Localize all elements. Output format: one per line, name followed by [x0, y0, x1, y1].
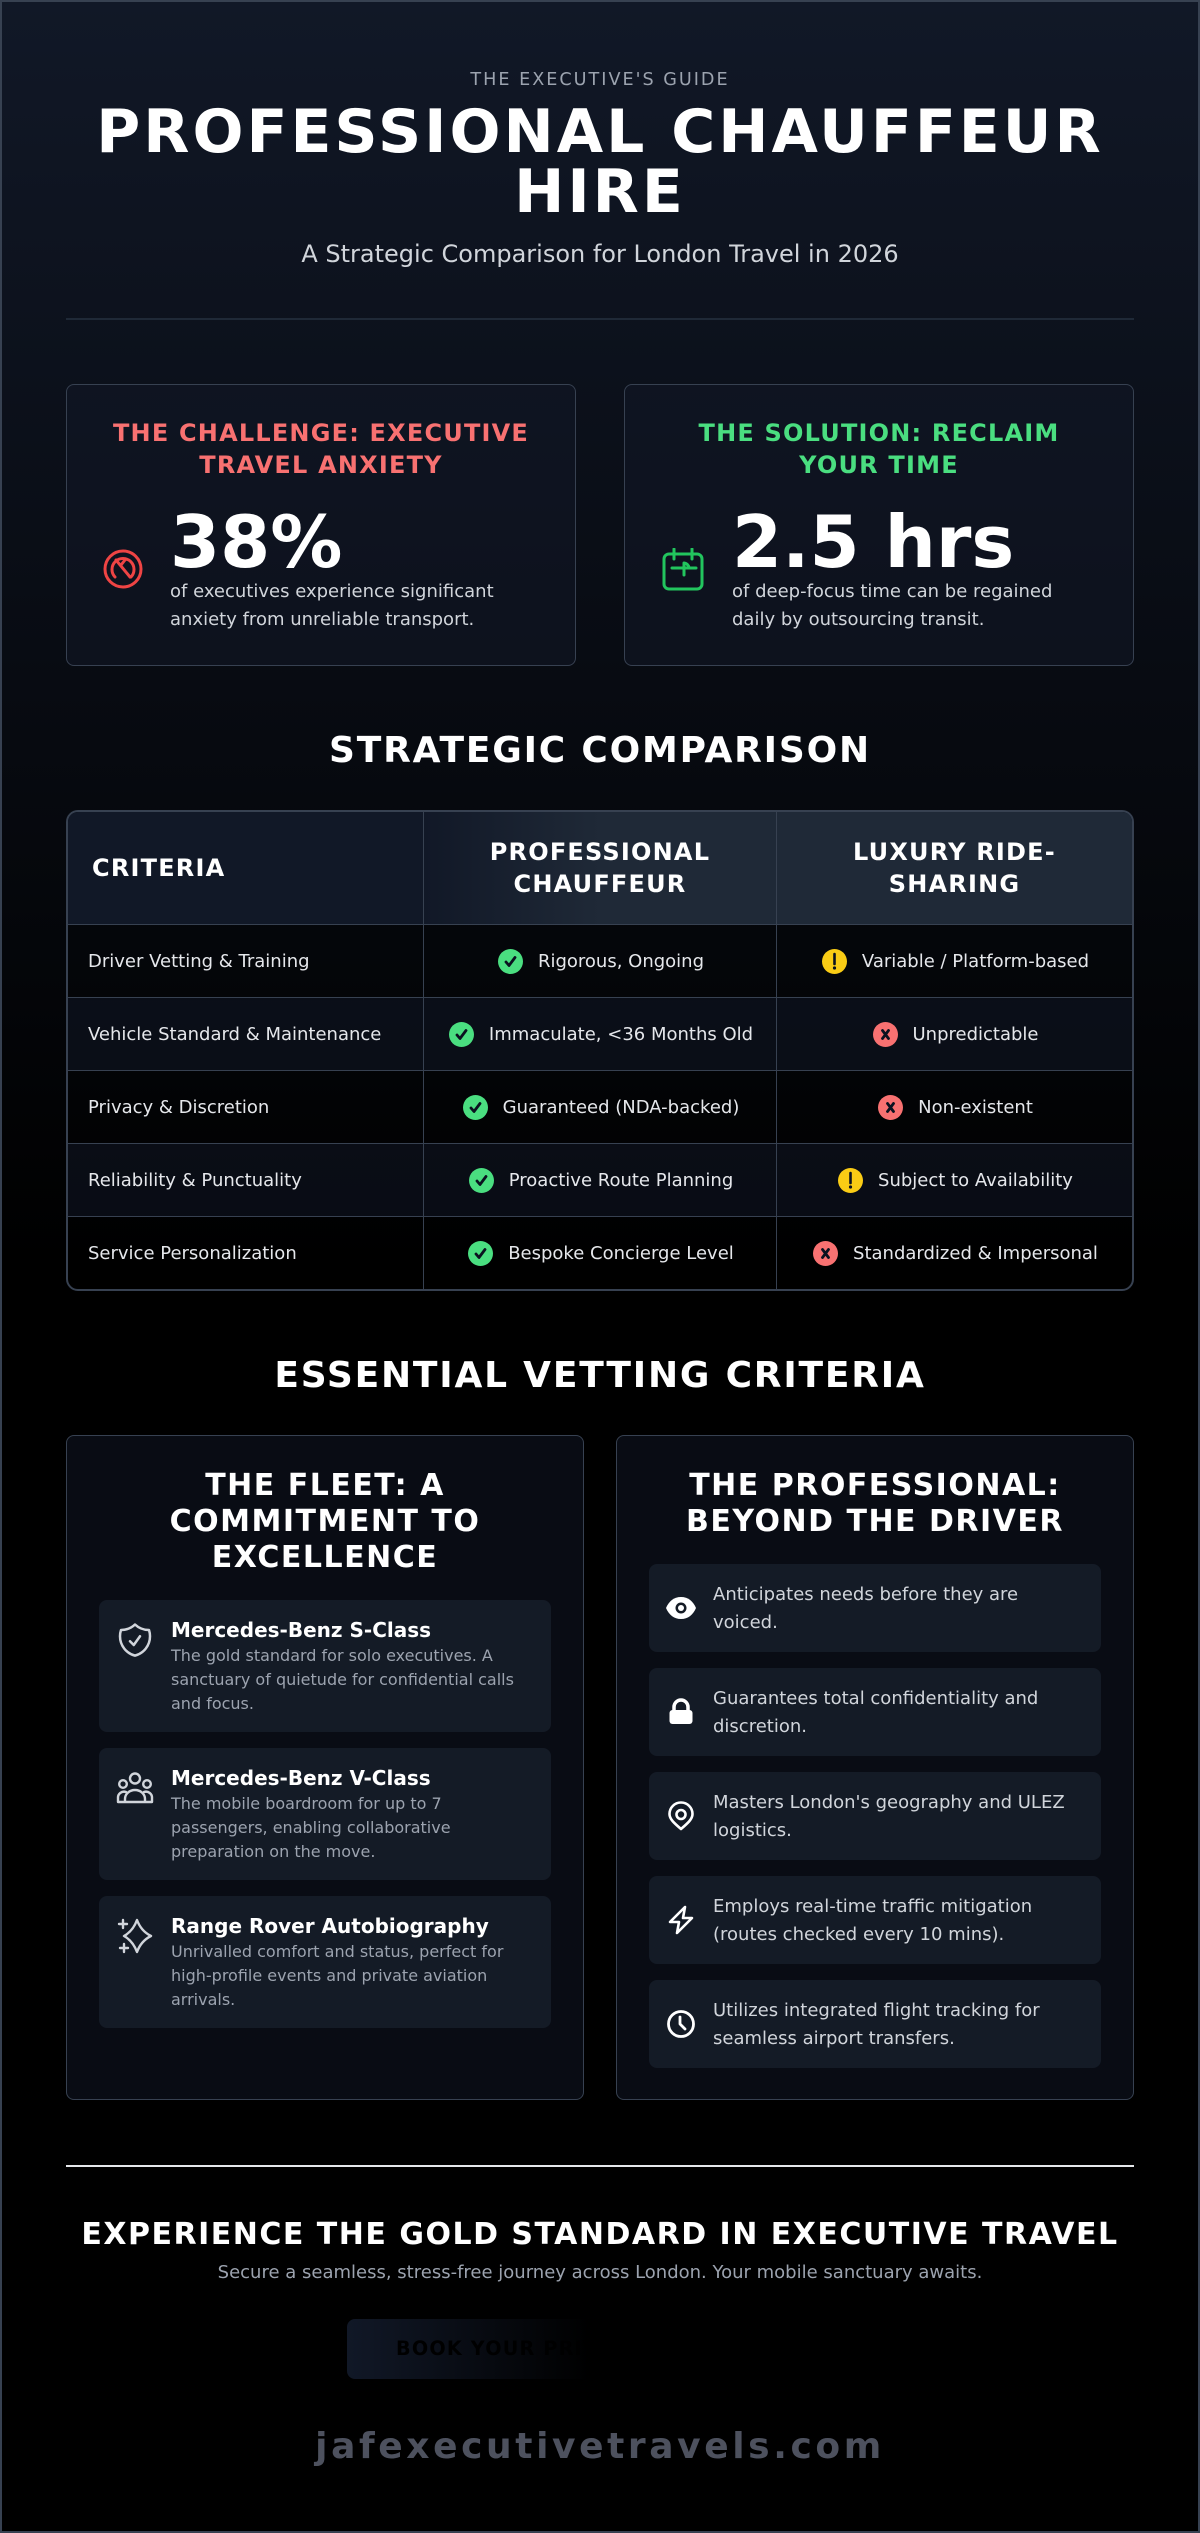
call to action heading: EXPERIENCE THE GOLD STANDARD IN EXECUTIVE TRAVEL: [81, 2217, 1119, 2252]
divider: [66, 318, 1134, 320]
fleet item: s-class: Mercedes-Benz S-Class: [171, 1618, 431, 1642]
footer rule: [66, 2165, 1134, 2167]
fleet item: v-class: preparation on the move.: [171, 1842, 375, 1861]
trait: confidentiality: discretion.: [713, 1716, 807, 1737]
trait: flight tracking: [649, 1980, 1101, 2068]
table row: vehicle standard: Unpredictable: [912, 1024, 1038, 1044]
table row: reliability: Reliability & Punctuality: [88, 1170, 302, 1190]
heading: strategic comparison: STRATEGIC COMPARISON: [329, 730, 871, 771]
fleet heading: EXCELLENCE: [212, 1540, 438, 1575]
icon: clock: [667, 2010, 695, 2038]
subtitle: A Strategic Comparison for London Travel in 2026: [301, 240, 899, 268]
column heading: luxury ride-sharing: [776, 812, 1132, 924]
fleet heading: THE FLEET: A: [205, 1468, 445, 1503]
trait: confidentiality: [649, 1668, 1101, 1756]
call to action text: Secure a seamless, stress-free journey across London. Your mobile sanctuary awaits.: [218, 2262, 982, 2283]
table row: personalization: Bespoke Concierge Level: [508, 1242, 734, 1264]
table row: vehicle standard: Immaculate, <36 Months Old: [489, 1024, 753, 1044]
icon: shield check: [118, 1623, 152, 1657]
statistic 38%: 38%: [170, 500, 342, 584]
solution heading: YOUR TIME: [799, 451, 959, 479]
column heading: professional chauffeur: [423, 812, 776, 924]
trait: anticipates: [649, 1564, 1101, 1652]
column heading: criteria: CRITERIA: [92, 854, 225, 882]
table row: privacy: Guaranteed (NDA-backed): [503, 1096, 739, 1118]
table row: personalization: Standardized & Impersonal: [853, 1242, 1098, 1264]
panel: the challenge: [66, 384, 576, 666]
column heading: luxury ride-sharing: SHARING: [889, 870, 1020, 898]
solution heading: [698, 419, 1059, 479]
icon: lock: [670, 1698, 692, 1724]
table row: vehicle standard: [68, 997, 1132, 1070]
fleet item: s-class: [99, 1600, 551, 1732]
button: book your private chauffeur: [347, 2319, 853, 2379]
icon: sparkles: [118, 1918, 152, 1954]
table row: privacy: [68, 1070, 1132, 1143]
panel: the professional: [616, 1435, 1134, 2100]
panel: the solution: [624, 384, 1134, 666]
title: HIRE: [514, 157, 686, 227]
fleet heading: COMMITMENT TO: [170, 1504, 480, 1539]
table row: vehicle standard: Vehicle Standard & Maintenance: [88, 1024, 381, 1044]
trait: anticipates: voiced.: [713, 1612, 778, 1633]
column heading: professional chauffeur: PROFESSIONAL: [490, 838, 710, 866]
challenge heading: TRAVEL ANXIETY: [199, 451, 443, 479]
trait: geography: logistics.: [713, 1820, 792, 1841]
button: book your private chauffeur: BOOK YOUR PRIVATE CHAUFFEUR: [396, 2337, 789, 2360]
fleet item: s-class: The gold standard for solo executives. A: [171, 1646, 493, 1665]
table row: reliability: Subject to Availability: [878, 1170, 1073, 1190]
comparison table: [66, 810, 1134, 1291]
table row: personalization: Service Personalization: [88, 1242, 297, 1264]
table row: personalization: [68, 1216, 1132, 1291]
trait: confidentiality: Guarantees total confidentiality and: [713, 1688, 1038, 1709]
icon: lightning bolt: [668, 1906, 694, 1934]
fleet item: range rover: Unrivalled comfort and status, perfect for: [171, 1942, 503, 1961]
fleet item: v-class: passengers, enabling collaborative: [171, 1818, 451, 1837]
solution heading: THE SOLUTION: RECLAIM: [699, 419, 1059, 447]
professional heading: [686, 1468, 1064, 1539]
table row: privacy: Privacy & Discretion: [88, 1096, 269, 1118]
panel: the fleet: [66, 1435, 584, 2100]
table row: driver vetting: Driver Vetting & Training: [88, 950, 310, 972]
website address: jafexecutivetravels.com: [315, 2426, 885, 2467]
icon: map pin: [668, 1801, 694, 1830]
professional heading: THE PROFESSIONAL:: [689, 1468, 1061, 1503]
fleet item: range rover: arrivals.: [171, 1990, 235, 2009]
trait: flight tracking: Utilizes integrated flight tracking for: [713, 2000, 1040, 2021]
solution description: daily by outsourcing transit.: [732, 609, 984, 630]
eyebrow: THE EXECUTIVE'S GUIDE: [470, 70, 730, 90]
solution description: [732, 581, 1052, 630]
fleet item: range rover: [99, 1896, 551, 2028]
fleet heading: [170, 1468, 480, 1575]
fleet item: v-class: The mobile boardroom for up to 7: [171, 1794, 442, 1813]
fleet item: v-class: Mercedes-Benz V-Class: [171, 1766, 431, 1790]
trait: flight tracking: seamless airport transfers.: [713, 2028, 955, 2049]
trait: traffic mitigation: (routes checked every 10 mins).: [713, 1924, 1004, 1945]
challenge description: of executives experience significant: [170, 581, 494, 602]
challenge description: [170, 581, 494, 630]
professional heading: BEYOND THE DRIVER: [686, 1504, 1064, 1539]
heading: essential vetting criteria: ESSENTIAL VETTING CRITERIA: [274, 1355, 926, 1396]
solution description: of deep-focus time can be regained: [732, 581, 1052, 602]
table row: privacy: Non-existent: [918, 1096, 1033, 1118]
column heading: luxury ride-sharing: LUXURY RIDE-: [853, 838, 1056, 866]
column heading: professional chauffeur: CHAUFFEUR: [514, 870, 686, 898]
icon: stress gauge: [104, 550, 142, 588]
fleet item: range rover: high-profile events and private aviation: [171, 1966, 487, 1985]
fleet item: s-class: and focus.: [171, 1694, 254, 1713]
trait: traffic mitigation: [649, 1876, 1101, 1964]
title: [96, 97, 1104, 227]
icon: calendar time: [662, 548, 704, 590]
challenge heading: [113, 419, 529, 479]
table row: driver vetting: Rigorous, Ongoing: [538, 950, 704, 972]
fleet item: range rover: Range Rover Autobiography: [171, 1914, 489, 1938]
challenge description: anxiety from unreliable transport.: [170, 609, 474, 630]
trait: geography: Masters London's geography and ULEZ: [713, 1792, 1065, 1813]
table row: reliability: Proactive Route Planning: [509, 1170, 733, 1190]
trait: geography: [649, 1772, 1101, 1860]
fleet item: v-class: [99, 1748, 551, 1880]
trait: anticipates: Anticipates needs before they are: [713, 1584, 1018, 1605]
table row: driver vetting: [68, 924, 1132, 997]
icon: eye: [666, 1597, 696, 1619]
title: PROFESSIONAL CHAUFFEUR: [96, 97, 1104, 167]
table row: driver vetting: Variable / Platform-based: [862, 950, 1089, 972]
icon: people: [116, 1772, 154, 1804]
challenge heading: THE CHALLENGE: EXECUTIVE: [113, 419, 529, 447]
statistic 2.5 hrs: 2.5 hrs: [732, 500, 1014, 584]
table header: [68, 812, 1132, 924]
trait: traffic mitigation: Employs real-time traffic mitigation: [713, 1896, 1032, 1917]
fleet item: s-class: sanctuary of quietude for confidential calls: [171, 1670, 514, 1689]
table row: reliability: [68, 1143, 1132, 1216]
